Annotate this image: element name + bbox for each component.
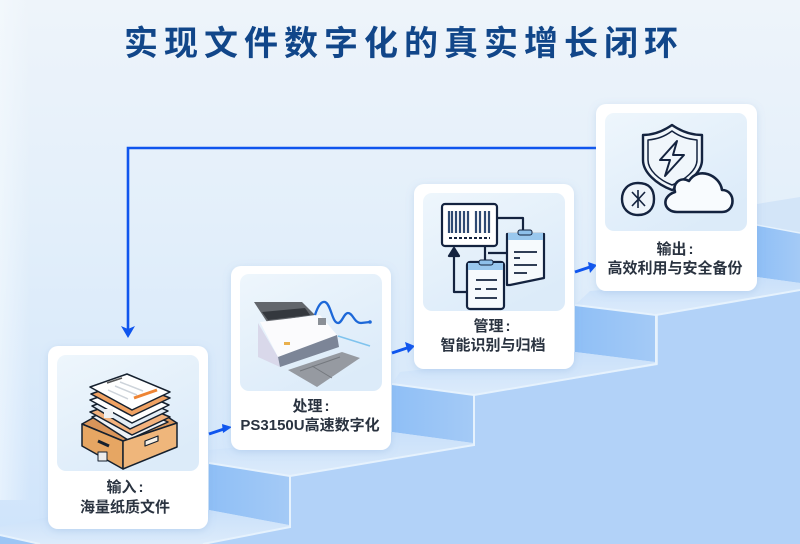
label: process: 处理:: [292, 398, 330, 415]
label: input: 输入:: [106, 479, 144, 496]
icon: barcode and clipboards: [442, 204, 544, 309]
icon: paper stack in box: [82, 374, 177, 469]
icon: shield, cloud and chip: [622, 125, 732, 215]
loop-back arrow: [121, 148, 597, 338]
label: process: PS3150U高速数字化: [240, 416, 380, 434]
arrow: manage to output: [575, 262, 597, 273]
panel: manage: [414, 184, 574, 369]
arrow: process to manage: [392, 342, 415, 353]
arrow: input to process: [209, 424, 232, 434]
panel: input: [48, 346, 208, 529]
label: manage: 管理:: [473, 318, 511, 335]
label: manage: 智能识别与归档: [440, 336, 546, 354]
label: output: 输出:: [656, 241, 694, 258]
label: input: 海量纸质文件: [80, 498, 170, 516]
icon: scanner: [254, 302, 372, 387]
label: output: 高效利用与安全备份: [607, 259, 743, 277]
title: 实现文件数字化的真实增长闭环: [124, 25, 684, 63]
panel: output: [596, 104, 757, 291]
panel: process: [231, 266, 391, 450]
